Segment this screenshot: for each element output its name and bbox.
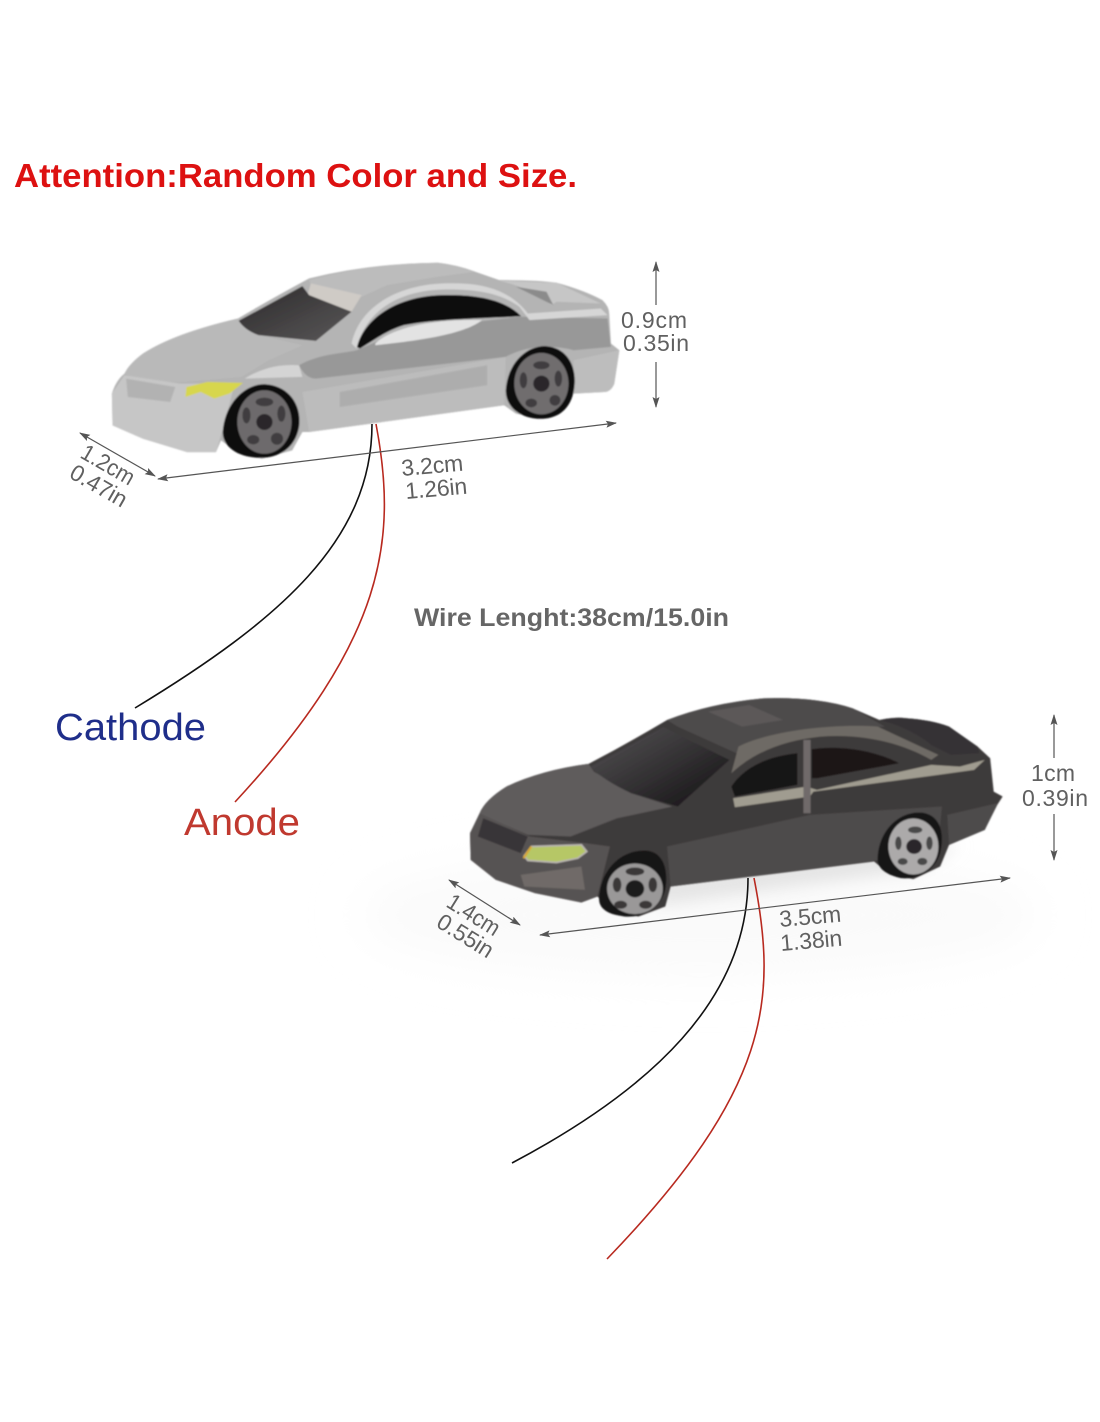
dark car front wheel — [599, 850, 666, 917]
dark car — [470, 698, 1003, 917]
silver car front wheel — [223, 384, 299, 458]
silver car front fascia — [112, 375, 235, 452]
dark car width arrow — [449, 880, 520, 925]
dark car height label: 0.39in — [1022, 785, 1088, 811]
dark car lower door panel — [667, 807, 942, 886]
silver car rear wheel — [506, 346, 575, 419]
silver car width label: 0.47in — [66, 459, 132, 512]
silver car roof — [309, 263, 475, 297]
silver car height arrow lower — [655, 362, 657, 407]
silver car length label: 1.26in — [404, 473, 468, 504]
dark car lower bumper highlight — [521, 866, 585, 890]
dark car grille — [478, 818, 528, 853]
dark car height arrow lower — [1053, 814, 1055, 860]
dark car hood — [480, 764, 672, 837]
silver car hood — [124, 318, 302, 382]
dark car height label: 1cm — [1031, 760, 1075, 786]
silver car height arrow upper — [655, 262, 657, 305]
dark car height arrow upper — [1053, 715, 1055, 758]
silver car height label: 0.9cm — [621, 307, 687, 333]
silver car length arrow — [158, 423, 616, 479]
silver car width arrow — [80, 433, 155, 476]
dark car length label: 1.38in — [779, 925, 843, 956]
dark car width label: 1.4cm — [442, 888, 505, 941]
silver car shoulder band — [299, 317, 611, 379]
silver car side window — [357, 295, 521, 349]
silver car window trim highlight — [352, 283, 608, 349]
dark car sunroof — [708, 705, 783, 727]
dark car length label: 3.5cm — [778, 901, 842, 932]
silver car windshield — [239, 286, 352, 341]
dark car windshield — [590, 727, 730, 807]
dark car wires: red — [607, 878, 764, 1259]
dark car wires: black — [512, 878, 748, 1163]
silver car rear deck — [499, 281, 601, 305]
silver car height label — [621, 307, 689, 356]
silver car length label — [400, 450, 468, 504]
dark car rear wheel — [877, 813, 942, 878]
dark car ground shadow — [360, 855, 1040, 975]
dark car headlight — [524, 845, 587, 862]
dark car height label — [1022, 760, 1088, 811]
dark car trim highlight — [733, 760, 985, 807]
anode label: Anode — [184, 802, 300, 844]
silver car width label — [66, 439, 140, 512]
dark car front fascia — [470, 813, 610, 902]
silver car headlight — [185, 382, 243, 399]
wire length note: Wire Lenght:38cm/15.0in — [414, 604, 729, 632]
dark car length arrow — [540, 878, 1010, 935]
silver car wires: anode red — [235, 424, 384, 802]
dark car roof — [667, 698, 885, 753]
dark car width label: 0.55in — [432, 908, 499, 963]
dark car contact shadow — [650, 845, 960, 905]
dark car side window rear — [812, 748, 899, 778]
silver car wires: cathode black — [135, 424, 372, 708]
silver car width label: 1.2cm — [76, 439, 140, 490]
silver car height label: 0.35in — [623, 330, 689, 356]
silver car — [112, 263, 619, 459]
dark car side window front — [731, 753, 797, 797]
silver car body — [112, 263, 619, 459]
cathode label: Cathode — [55, 707, 206, 749]
silver car rear bumper — [574, 350, 619, 394]
silver car door panel — [302, 357, 506, 432]
dark car rear spoiler — [879, 718, 979, 755]
dark car length label — [778, 901, 843, 956]
dark car body — [470, 698, 1003, 916]
dark car rear bumper — [947, 803, 997, 845]
dark car width label — [432, 888, 505, 963]
title: Attention:Random Color and Size. — [14, 157, 577, 194]
silver car length label: 3.2cm — [400, 450, 464, 481]
